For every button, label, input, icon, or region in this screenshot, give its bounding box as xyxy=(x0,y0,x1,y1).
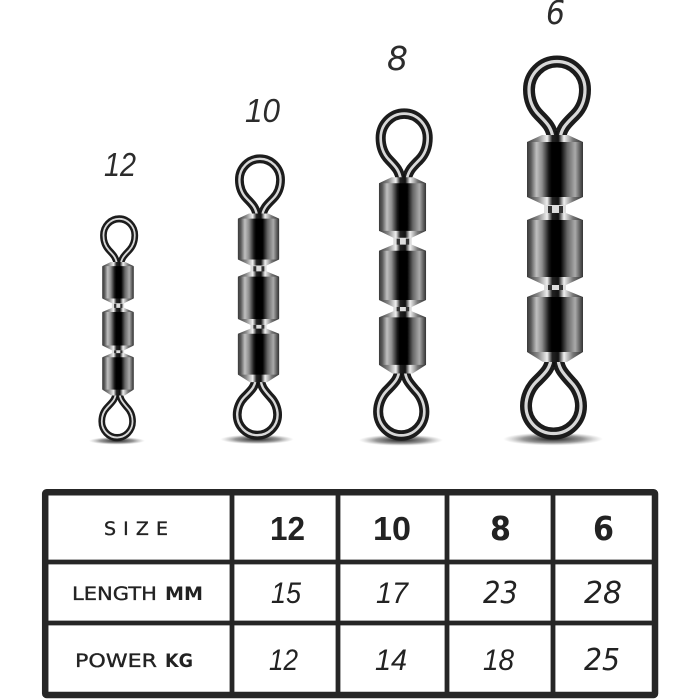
row: length mm: 15 xyxy=(271,577,301,610)
row: power kg: 14 xyxy=(375,644,407,677)
row: length mm: MM xyxy=(165,583,203,605)
row: length mm: 23 xyxy=(483,576,518,611)
row: length mm: 28 xyxy=(584,576,622,611)
row: length mm xyxy=(72,576,622,611)
row: power kg: 25 xyxy=(584,643,620,678)
row: size: 12 xyxy=(270,510,305,547)
row: size: 8 xyxy=(490,509,511,548)
row: length mm: 17 xyxy=(376,577,409,610)
row: power kg xyxy=(75,643,620,678)
swivel: size 12 xyxy=(89,219,145,445)
swivel: size 10 xyxy=(220,159,294,444)
label: size 10: 10 xyxy=(245,92,281,129)
row: power kg: 12 xyxy=(269,644,298,677)
row: size: SIZE xyxy=(104,518,168,540)
label: size 8: 8 xyxy=(387,39,408,78)
row: power kg: KG xyxy=(165,650,193,672)
row: length mm: LENGTH xyxy=(72,583,157,605)
row: size: 6 xyxy=(593,509,614,548)
row: power kg: 18 xyxy=(483,644,514,677)
row: size: 10 xyxy=(373,510,411,547)
swivel: size 6 xyxy=(503,62,603,446)
swivel: size 8 xyxy=(359,114,443,446)
size table xyxy=(45,492,655,695)
table grid xyxy=(45,492,655,695)
row: size xyxy=(104,509,614,548)
row: power kg: POWER xyxy=(75,650,157,672)
label: size 12: 12 xyxy=(104,146,136,183)
